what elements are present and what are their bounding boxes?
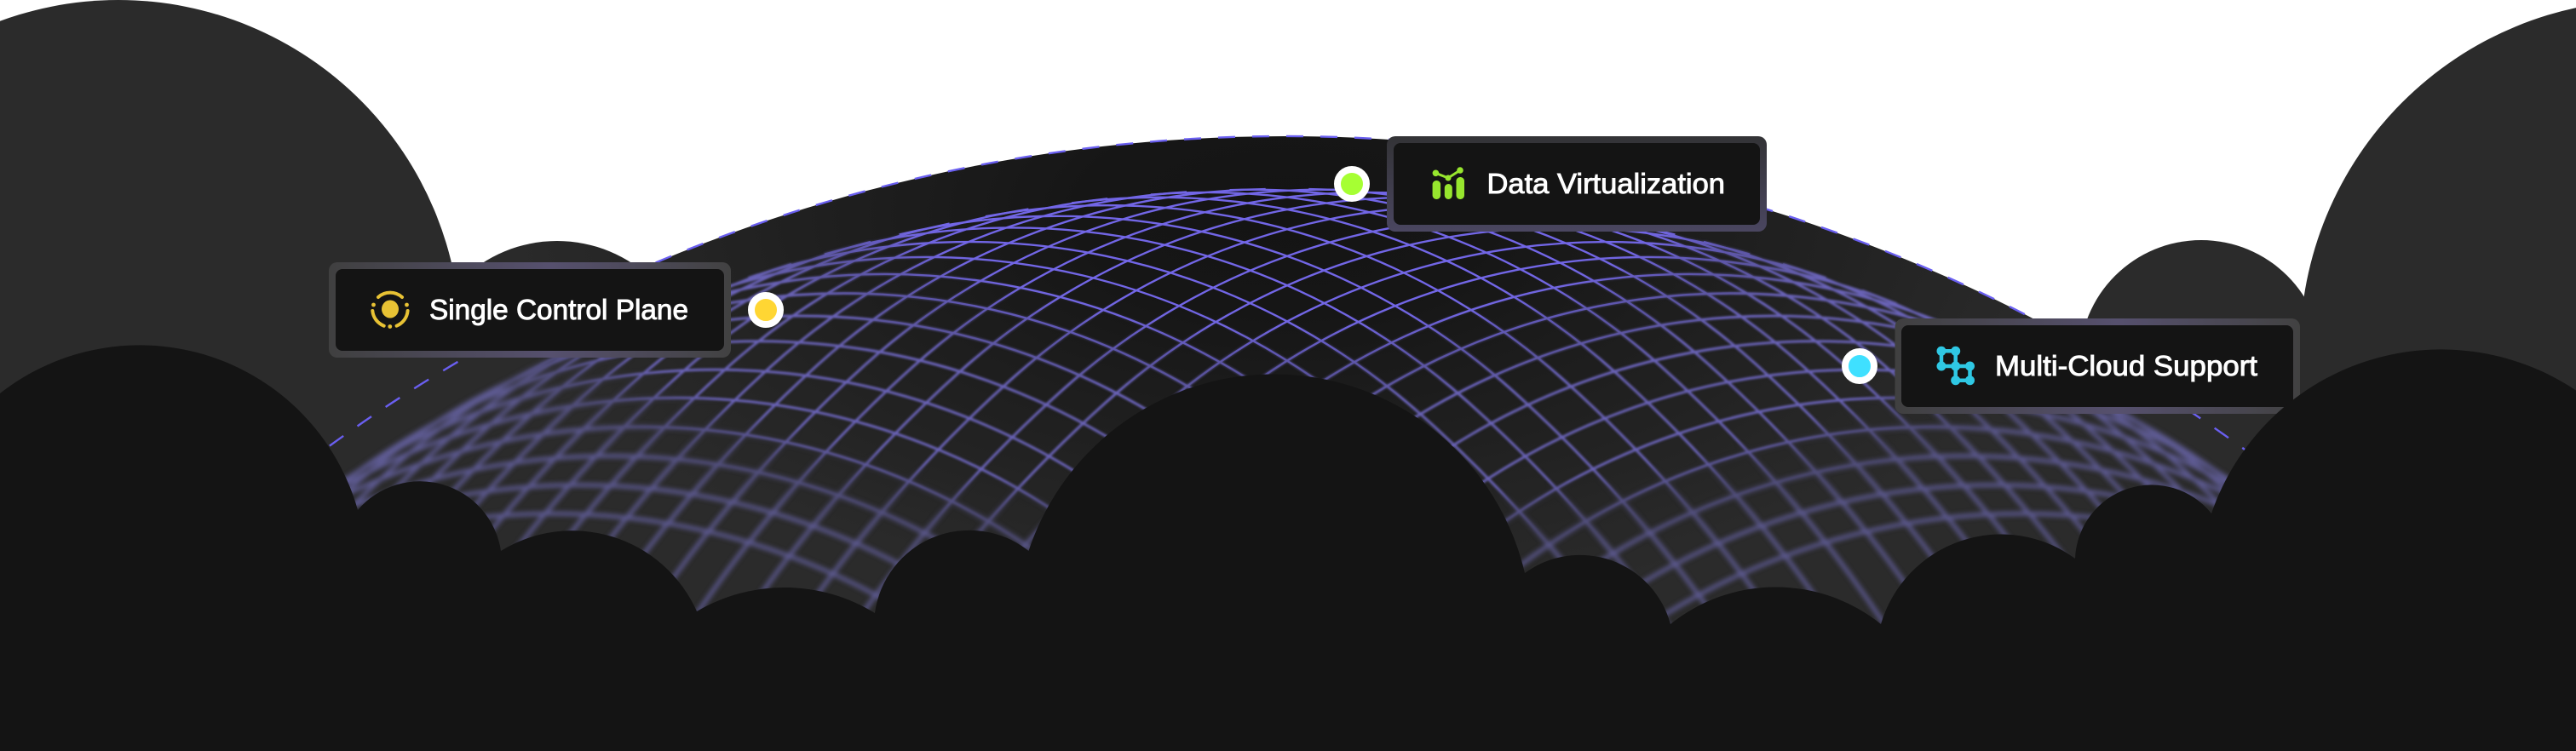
mesh: soft middle region <box>513 228 1983 541</box>
mesh: sharp top region <box>750 187 1826 406</box>
icon: connected nodes <box>1937 347 1975 385</box>
callout: Data Virtualization <box>1387 136 1767 232</box>
marker dot: yellow <box>751 295 780 324</box>
foreground cloud silhouette <box>0 345 2576 751</box>
callout: Multi-Cloud Support <box>1895 318 2300 414</box>
hill: small left <box>420 241 694 515</box>
label: Multi-Cloud Support: Multi-Cloud Support <box>1995 350 2257 381</box>
marker dot: green <box>1337 169 1366 198</box>
hill: small right <box>2079 240 2323 484</box>
hill: large left <box>0 0 461 685</box>
icon: control plane target <box>371 293 409 329</box>
icon: bar chart with trend line <box>1433 167 1464 199</box>
mesh: blurred outer region <box>344 358 2229 624</box>
label: Single Control Plane: Single Control Plane <box>429 294 688 325</box>
hill: large right <box>2300 0 2576 698</box>
marker dot: cyan <box>1845 352 1874 381</box>
curved mesh grid on the dome <box>344 187 2229 624</box>
label: Data Virtualization: Data Virtualization <box>1487 168 1725 199</box>
callout: Single Control Plane <box>329 262 731 358</box>
